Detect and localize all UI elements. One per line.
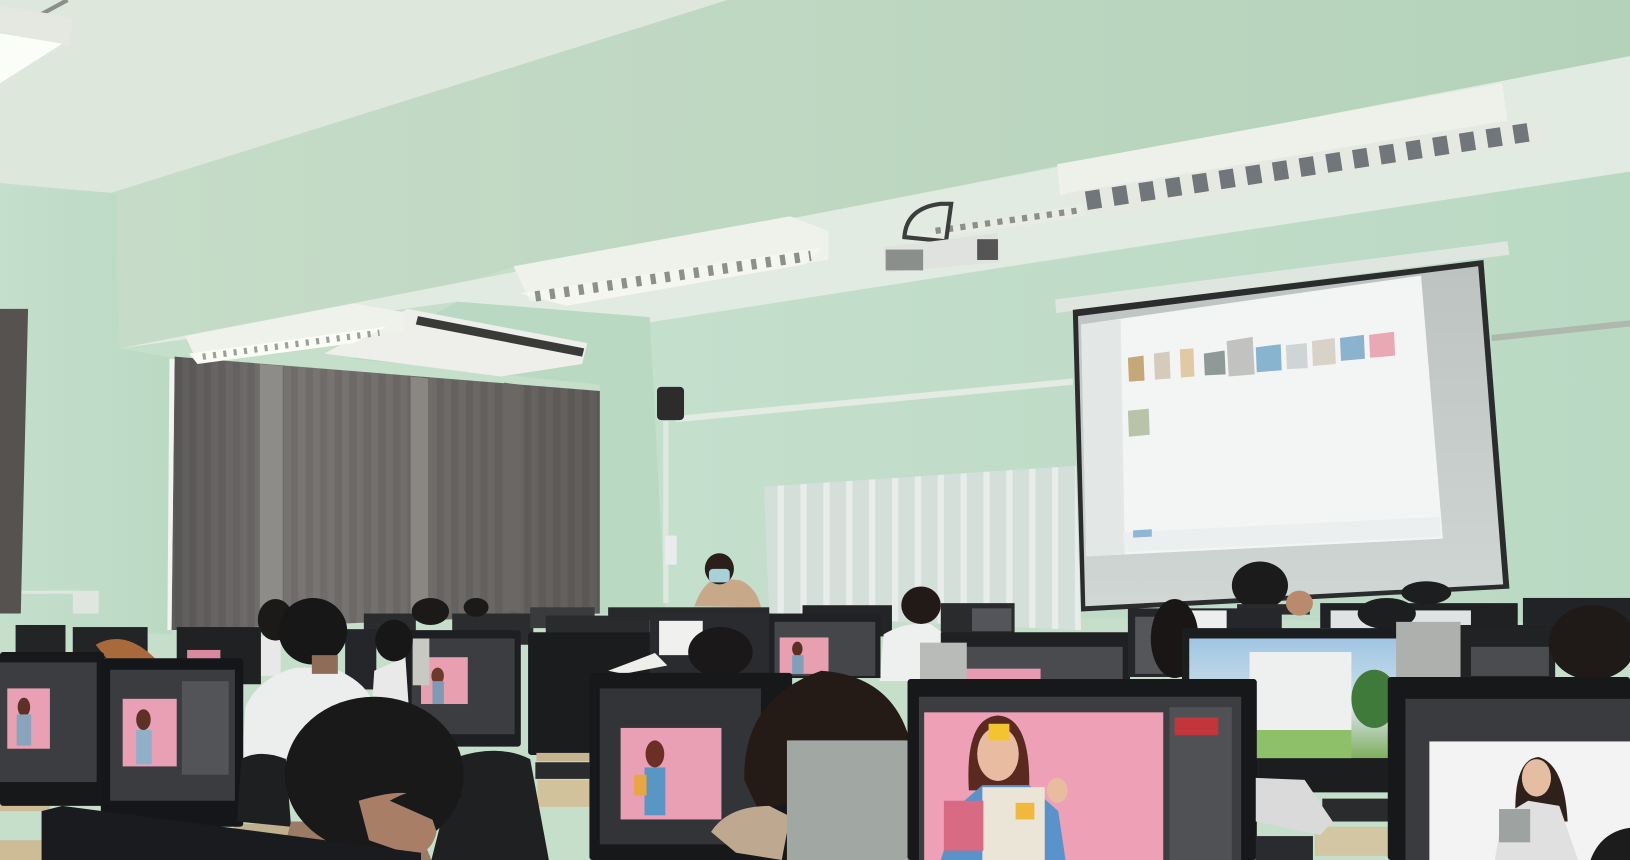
person: hair at left [96,639,156,666]
monitor: wide back [941,632,1130,684]
person: white shirt centre left [242,598,371,759]
monitor: front left [0,652,104,806]
monitor: large centre front [908,679,1257,860]
person: front left head [281,697,464,860]
projected window [1081,276,1443,556]
monitor: pink screen behind [769,614,880,678]
grey paper sticker right [1396,622,1461,677]
monitor: front second [101,658,243,827]
grey card [787,740,919,860]
people: far back heads [412,581,1451,629]
person: woman hair right [1151,599,1199,678]
projection screen [1055,241,1509,611]
person: standing at right [1232,562,1313,616]
desks [0,753,1390,860]
monitor: row 2 side [345,629,376,689]
monitor: landscape desktop screen [1182,628,1398,792]
monitor: front bottom left [42,806,421,860]
person: back row white shirt [879,587,942,681]
projector [884,204,1000,272]
curtains [0,309,600,630]
speaker [657,387,684,420]
wall column [353,302,665,614]
monitor: front centre with pink screen [589,673,792,860]
monitor: small whitepaper screen [650,614,772,674]
pink photo with woman [924,712,1163,860]
colour panel [1169,707,1232,860]
monitor: dark screen [528,632,665,755]
seat behind large monitor [1256,836,1313,860]
ceiling light: centre [514,216,829,306]
wall conduits [16,320,1630,614]
person: arm at right [1256,778,1333,835]
ceiling underside [120,56,1630,348]
grey paper sticker centre [920,643,967,680]
person: centre head behind monitor [608,627,753,677]
monitor: row 2 left [177,627,261,684]
ceiling left [0,0,728,193]
monitor: right back [1128,608,1282,677]
chair backs [237,751,549,860]
back row monitors [16,598,1630,658]
ceiling light: far left corner [0,0,73,83]
monitor: front right with white screen [1388,677,1630,860]
left wall [0,185,177,634]
ceiling light: right [894,83,1542,239]
ceiling beam [109,0,1630,348]
person: white shirt near centre [372,620,413,704]
person: centre front head with clip [711,671,915,860]
ceiling light: left [185,304,403,364]
whiteboard [764,466,1081,630]
keyboards [535,762,1390,822]
person: left back [258,599,293,676]
teacher [694,553,761,607]
person: right edge head [1549,605,1630,680]
monitor: far right back [1460,625,1555,677]
monitor: pink screen centre back [405,630,521,747]
front wall [650,172,1630,624]
air conditioner [324,309,587,376]
